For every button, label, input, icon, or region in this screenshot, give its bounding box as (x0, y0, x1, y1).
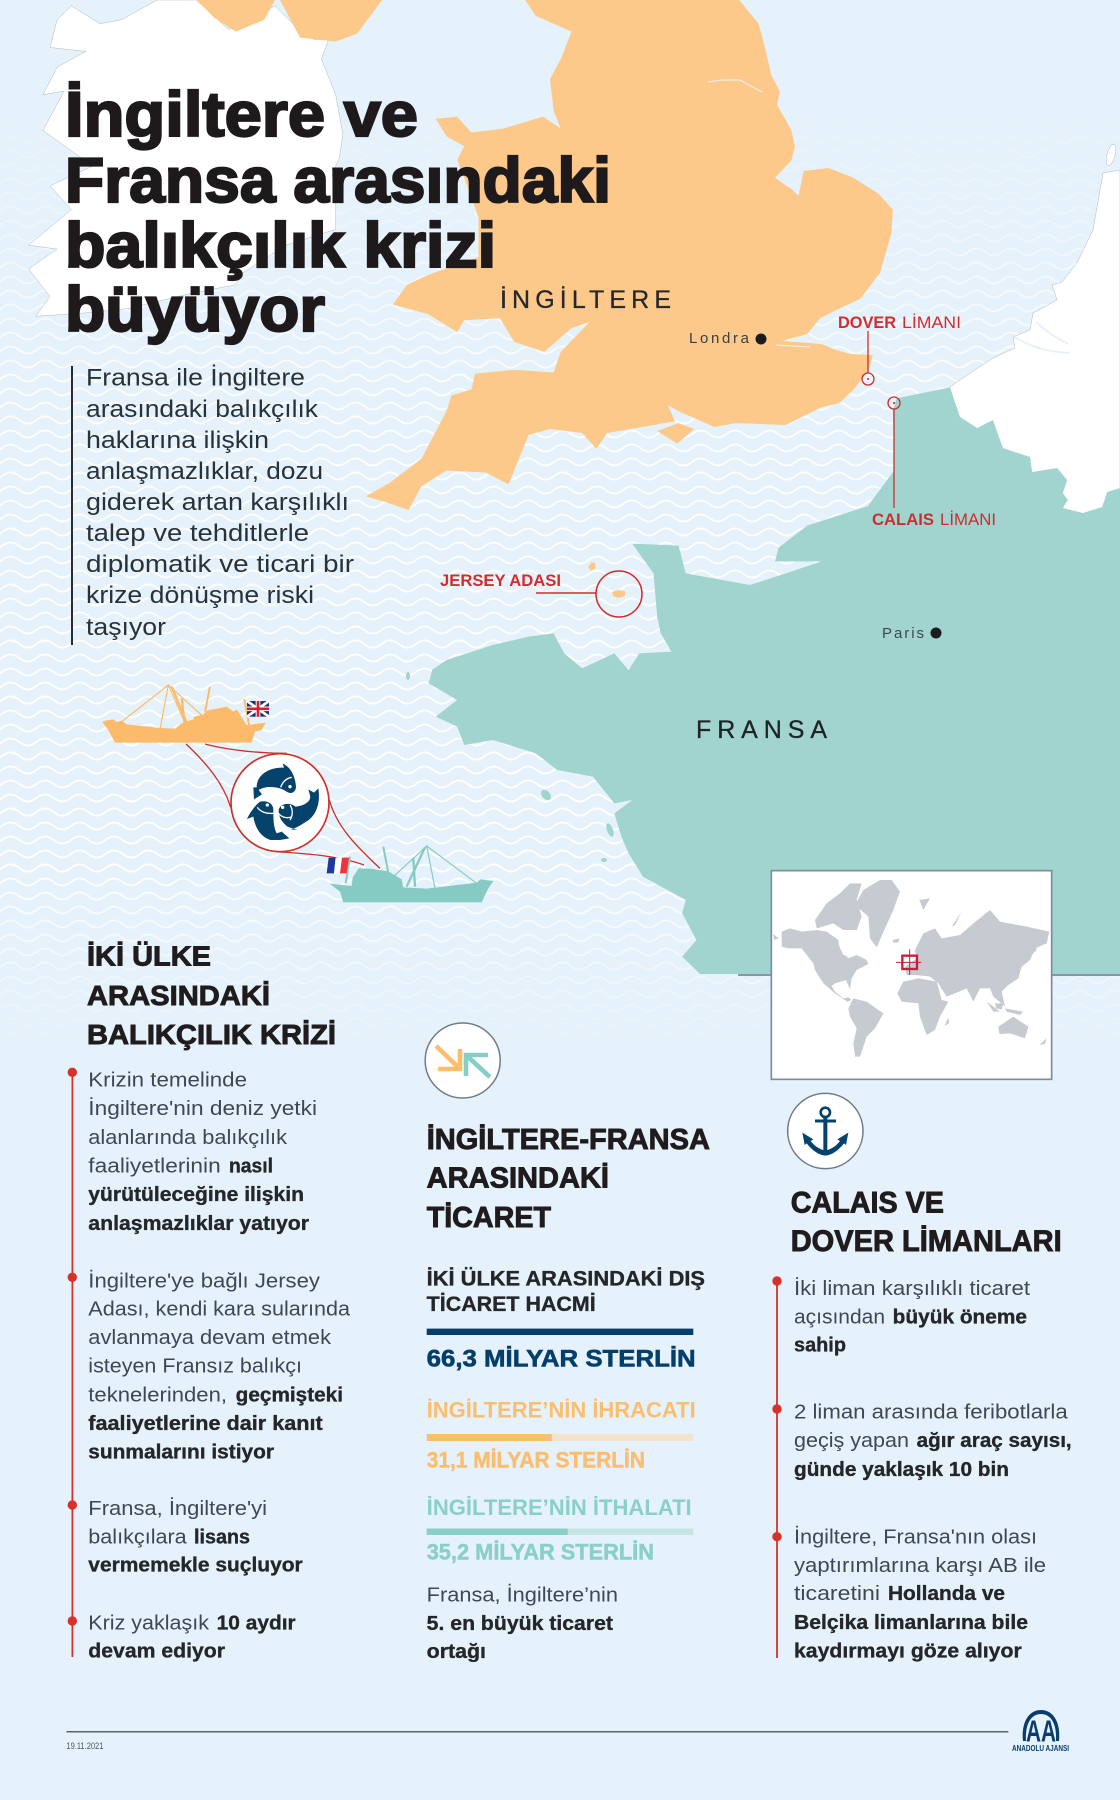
callout: Calais Limanı (872, 397, 996, 529)
bullet: lisans: vermemekle suçluyor (88, 1554, 303, 1577)
bullet: Hollanda ve Belçika: yaptırımlarına karşı AB ile (794, 1554, 1046, 1577)
panel: middle column, trade (425, 1023, 710, 1663)
stat: UK exports: İNGİLTERE’NİN İHRACATI (427, 1397, 696, 1422)
stat: UK imports: İNGİLTERE’NİN İTHALATI (427, 1495, 692, 1520)
heading: Calais ve Dover limanları: DOVER LİMANLARI (791, 1225, 1062, 1258)
bullet: temel anlaşmazlık (88, 1069, 317, 1235)
text: trade partner note: Fransa, İngiltere’nin (427, 1583, 618, 1606)
bullet: temel anlaşmazlık: yürütüleceğine ilişkin (88, 1183, 304, 1206)
callout: Calais Limanı: LİMANI (940, 510, 996, 529)
bullet: Jersey Adası: geçmişteki (236, 1384, 343, 1407)
bullet: Jersey Adası: Adası, kendi kara sularında (88, 1298, 351, 1321)
callout: Calais Limanı: CALAIS (872, 510, 934, 529)
bullet: feribot: geçiş yapan (794, 1429, 909, 1452)
map: Ireland and white neighbouring land (29, 0, 1120, 525)
callout: Jersey Adası (440, 571, 642, 617)
bullet: süre: 10 aydır (217, 1611, 296, 1634)
title (65, 80, 611, 345)
bullet: lisans (88, 1497, 303, 1577)
bullet: Jersey Adası: faaliyetlerine dair kanıt (88, 1412, 323, 1435)
bullet: Hollanda ve Belçika: ticaretini (794, 1582, 880, 1605)
stat: total trade volume (427, 1268, 705, 1372)
bullet: Hollanda ve Belçika: İngiltere, Fransa'nın olası (794, 1525, 1037, 1548)
icon: British fishing boat (102, 685, 269, 743)
label: Londra: Londra (689, 330, 750, 347)
stat: total trade volume: 66,3 MİLYAR STERLİN (427, 1346, 696, 1372)
callout: Jersey Adası: JERSEY ADASI (440, 571, 561, 590)
callout: Dover Limanı (838, 313, 961, 385)
bullet: önem: büyük öneme (893, 1305, 1027, 1328)
stat: total trade volume: TİCARET HACMİ (427, 1293, 596, 1316)
text: trade partner note: 5. en büyük ticaret (427, 1612, 613, 1635)
stat: UK imports: 35,2 MİLYAR STERLİN (427, 1539, 654, 1564)
bullet: önem: sahip (794, 1334, 846, 1357)
heading: Calais ve Dover limanları (791, 1186, 1062, 1258)
bullet: Jersey Adası: İngiltere'ye bağlı Jersey (88, 1269, 321, 1292)
heading: İngiltere-Fransa arasındaki ticaret: TİCARET (427, 1202, 551, 1234)
title: İngiltere ve (65, 80, 418, 150)
heading: İngiltere-Fransa arasındaki ticaret: İNGİLTERE-FRANSA (427, 1124, 710, 1156)
bullet: önem (794, 1277, 1030, 1357)
bullet: süre: Kriz yaklaşık (88, 1611, 210, 1634)
bullet: temel anlaşmazlık: Krizin temelinde (88, 1069, 247, 1092)
icon: trade arrows (425, 1023, 500, 1098)
stat: UK exports (427, 1397, 696, 1472)
logo: Anadolu Ajansı (1012, 1710, 1069, 1753)
heading: Calais ve Dover limanları: CALAIS VE (791, 1186, 944, 1219)
bullet: önem: açısından (794, 1305, 885, 1328)
intro text block: anlaşmazlıklar, dozu (86, 458, 323, 485)
map: France (406, 387, 1120, 974)
bullet: Hollanda ve Belçika: kaydırmayı göze alıyor (794, 1640, 1022, 1663)
bullet: feribot: 2 liman arasında feribotlarla (794, 1400, 1068, 1424)
bullet: Hollanda ve Belçika (794, 1525, 1046, 1663)
intro text block: Fransa ile İngiltere (86, 364, 305, 392)
bullet: feribot: ağır araç sayısı, (917, 1429, 1072, 1452)
intro text block: diplomatik ve ticari bir (86, 551, 354, 578)
title: Fransa arasındaki (65, 146, 611, 216)
icon: anchor (788, 1093, 863, 1169)
bullet: temel anlaşmazlık: anlaşmazlıklar yatıyor (88, 1212, 309, 1235)
logo: Anadolu Ajansı: ANADOLU AJANSI (1012, 1744, 1069, 1753)
illustration: UK and French boats with fish (102, 685, 493, 902)
text: trade partner note: ortağı (427, 1640, 486, 1663)
icon: French fishing boat (327, 846, 493, 902)
callout: Dover Limanı: LİMANI (902, 313, 961, 332)
bullet: süre (88, 1611, 296, 1663)
title: büyüyor (65, 275, 325, 345)
text: trade partner note (427, 1583, 618, 1663)
intro text block: giderek artan karşılıklı (86, 489, 349, 516)
bullet: önem: İki liman karşılıklı ticaret (794, 1277, 1030, 1300)
heading: İngiltere-Fransa arasındaki ticaret: ARASINDAKİ (427, 1163, 609, 1195)
bullet: Jersey Adası: sunmalarını istiyor (88, 1440, 274, 1463)
bullet: Jersey Adası: teknelerinden, (88, 1384, 227, 1407)
bullet: lisans: lisans (194, 1525, 250, 1548)
heading: İngiltere-Fransa arasındaki ticaret (427, 1124, 710, 1234)
heading: İki ülke arasındaki balıkçılık krizi: BALIKÇILIK KRİZİ (87, 1019, 336, 1050)
icon: fish in circle (231, 754, 329, 852)
bullet: Jersey Adası: isteyen Fransız balıkçı (88, 1354, 302, 1377)
callout: Dover Limanı: DOVER (838, 313, 896, 332)
heading: İki ülke arasındaki balıkçılık krizi (87, 941, 336, 1050)
intro text block: arasındaki balıkçılık (86, 396, 319, 423)
bullet: temel anlaşmazlık: faaliyetlerinin (88, 1154, 221, 1177)
map: England (196, 0, 893, 598)
bullet: Jersey Adası (88, 1269, 351, 1463)
logo: Anadolu Ajansı: AA (1026, 1714, 1056, 1748)
bullet: feribot (794, 1400, 1072, 1481)
label: İngiltere: İNGİLTERE (500, 285, 671, 314)
title: balıkçılık krizi (65, 211, 496, 281)
stat: UK exports: 31,1 MİLYAR STERLİN (427, 1448, 645, 1472)
bullet: feribot: günde yaklaşık 10 bin (794, 1458, 1009, 1481)
bullet: Jersey Adası: avlanmaya devam etmek (88, 1326, 332, 1349)
stat: total trade volume: İKİ ÜLKE ARASINDAKİ DIŞ (427, 1268, 705, 1291)
heading: İki ülke arasındaki balıkçılık krizi: İKİ ÜLKE (87, 941, 211, 972)
bullet: temel anlaşmazlık: İngiltere'nin deniz yetki (88, 1097, 317, 1120)
bullet: lisans: balıkçılara (88, 1525, 187, 1548)
bullet: süre: devam ediyor (88, 1640, 225, 1663)
stat: UK imports (427, 1495, 693, 1564)
timeline rail (68, 1068, 77, 1657)
intro text block: haklarına ilişkin (86, 427, 269, 454)
panel: world locator map (771, 871, 1052, 1079)
label: Paris: Paris (882, 625, 924, 642)
label: Fransa: FRANSA (696, 716, 827, 744)
bullet: temel anlaşmazlık: nasıl (229, 1154, 273, 1177)
bullet: temel anlaşmazlık: alanlarında balıkçılık (88, 1126, 288, 1149)
panel: left column, fishing crisis (68, 941, 351, 1663)
timeline rail (772, 1276, 782, 1658)
connector lines (186, 744, 380, 868)
intro text block (71, 364, 354, 645)
intro text block: taşıyor (86, 614, 166, 641)
intro text block: krize dönüşme riski (86, 582, 314, 609)
footer rule (66, 1731, 1008, 1732)
footer date: 19.11.2021 (66, 1741, 103, 1751)
bullet: lisans: Fransa, İngiltere'yi (88, 1497, 267, 1520)
intro text block: talep ve tehditlerle (86, 520, 309, 547)
panel: right column, ports (772, 1093, 1072, 1663)
bullet: Hollanda ve Belçika: Belçika limanlarına bile (794, 1611, 1028, 1634)
bullet: Hollanda ve Belçika: Hollanda ve (888, 1582, 1005, 1605)
heading: İki ülke arasındaki balıkçılık krizi: ARASINDAKİ (87, 980, 270, 1011)
